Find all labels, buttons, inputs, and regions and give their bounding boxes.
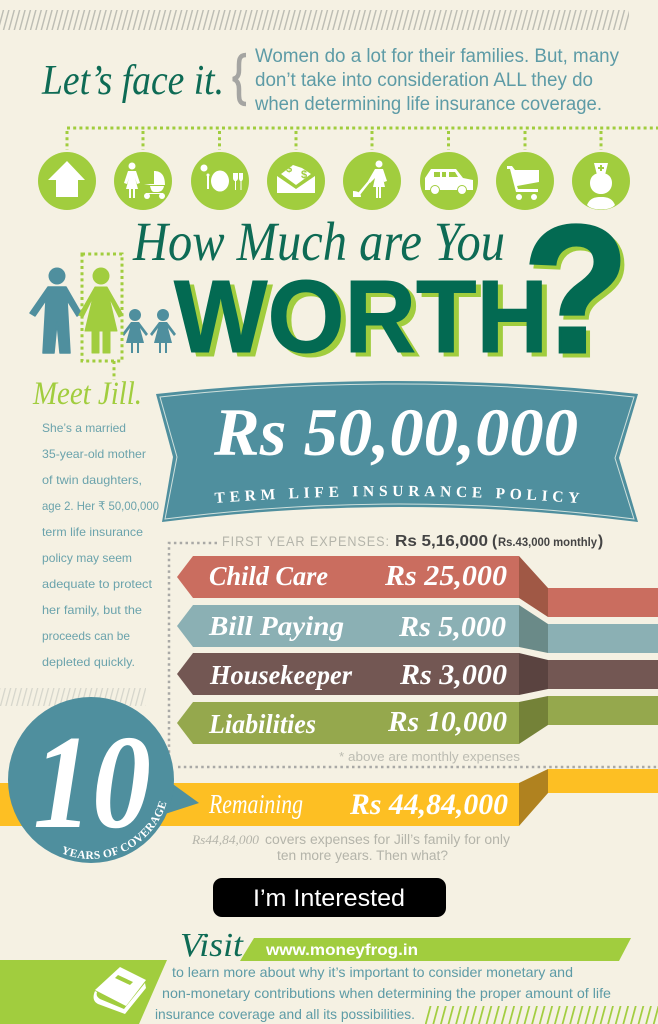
banner: policy: TERM LIFE INSURANCE POLICY [214, 486, 580, 503]
ribbon: bill paying: Bill Paying [208, 611, 344, 641]
text: covers expenses: covers expenses for Jill’s family for only [265, 832, 510, 847]
intro text [254, 46, 619, 115]
ribbon: remaining: Rs 44,84,000 [349, 788, 508, 821]
text: Jill's story: proceeds can be [42, 629, 130, 643]
ribbon: child care: Child Care [209, 561, 328, 591]
intro text: when determining life insurance coverage. [254, 94, 602, 115]
brace [233, 55, 246, 104]
heading: Visit: Visit [180, 927, 245, 964]
text: Jill's story: her family, but the [42, 603, 142, 617]
badge: 10 years of coverage [8, 697, 199, 863]
icon: family [30, 268, 176, 353]
intro text: Women do a lot for their families. But, many [255, 46, 619, 67]
icon: envelope with money: $ [301, 169, 307, 181]
text: Jill's story [42, 421, 159, 669]
text: learn more: to learn more about why it’s important to consider monetary and [172, 964, 573, 980]
heading: first year expenses: ( [492, 533, 498, 550]
icon: envelope with money [277, 163, 315, 193]
ribbon: child care: Rs 25,000 [384, 561, 507, 592]
text: Jill's story: policy may seem [42, 551, 132, 565]
ribbon: housekeeper: Rs 3,000 [399, 660, 507, 691]
icon: book [94, 967, 146, 1014]
intro text: don’t take into consideration ALL they do [255, 70, 593, 91]
url banner: www.moneyfrog.in [265, 942, 418, 959]
ribbon: remaining: Remaining [208, 789, 303, 819]
icon: car [425, 169, 473, 194]
text: covers expenses: Rs44,84,000 [191, 832, 260, 847]
button: I’m Interested [253, 885, 405, 912]
heading: WORTH?: ? [527, 191, 633, 395]
text: covers expenses [191, 832, 510, 863]
ribbon: housekeeper [177, 653, 658, 695]
heading: first year expenses: Rs.43,000 monthly [498, 537, 598, 549]
heading: WORTH? [174, 187, 633, 395]
icon: shopping cart [507, 166, 539, 200]
heading: first year expenses: FIRST YEAR EXPENSES: [222, 534, 390, 549]
heading: WORTH?: WORTH [179, 263, 553, 378]
text: Jill's story: 35-year-old mother [42, 447, 146, 461]
ribbon: liabilities: Rs 10,000 [387, 707, 507, 738]
heading: first year expenses: Rs 5,16,000 [395, 533, 488, 550]
text: Jill's story: of twin daughters, [42, 473, 142, 487]
ribbon: bill paying: Rs 5,000 [398, 612, 506, 643]
text: Jill's story: term life insurance [42, 525, 143, 539]
button [213, 878, 446, 917]
heading: first year expenses [222, 533, 603, 550]
ribbon: child care [177, 556, 658, 617]
text: covers expenses: ten more years. Then what? [277, 848, 448, 863]
ribbon: housekeeper: Housekeeper [209, 660, 352, 690]
badge: 10 years of coverage: YEARS OF COVERAGE [62, 801, 166, 859]
text: Jill's story: age 2. Her ₹ 50,00,000 [42, 499, 159, 513]
icon: plate and cutlery [200, 164, 243, 192]
text: learn more: insurance coverage and all its possibilities. [155, 1006, 415, 1022]
heading: Meet Jill: Meet Jill. [32, 376, 142, 412]
icon: woman with vacuum [353, 160, 387, 198]
icon row [38, 152, 630, 210]
ribbon: liabilities: Liabilities [208, 709, 316, 739]
icon: mother with stroller [124, 162, 165, 199]
heading: Let's face it: Let’s face it. [41, 58, 224, 104]
icon: nurse [587, 163, 615, 210]
green footer block [0, 960, 167, 1024]
text: learn more [155, 964, 611, 1022]
expenses dotted frame [169, 543, 217, 762]
ribbon: remaining [0, 769, 658, 826]
text: Jill's story: She’s a married [42, 421, 126, 435]
heading: WORTH?: WORTH [174, 259, 548, 374]
url banner [240, 938, 631, 961]
note: * above are monthly expenses [339, 749, 521, 764]
text: Jill's story: depleted quickly. [42, 655, 135, 669]
heading: first year expenses: ) [598, 533, 603, 550]
text: Jill's story: adequate to protect [42, 577, 153, 591]
heading: WORTH?: ? [523, 187, 629, 391]
badge: 10 years of coverage: 10 [33, 708, 151, 856]
banner amount: Rs 50,00,000 [213, 394, 578, 470]
heading: How Much are You: How Much are You [132, 211, 505, 272]
dotted box around Jill [82, 254, 122, 380]
dotted connector [67, 128, 658, 150]
banner: policy [156, 381, 638, 522]
ribbon: liabilities [177, 696, 658, 744]
text: learn more: non-monetary contributions when determining the proper amount of life [162, 985, 611, 1001]
ribbon: bill paying [177, 605, 658, 653]
banner subtitle [215, 496, 640, 510]
icon: envelope with money: $ [286, 163, 292, 175]
icon: house [48, 161, 85, 197]
